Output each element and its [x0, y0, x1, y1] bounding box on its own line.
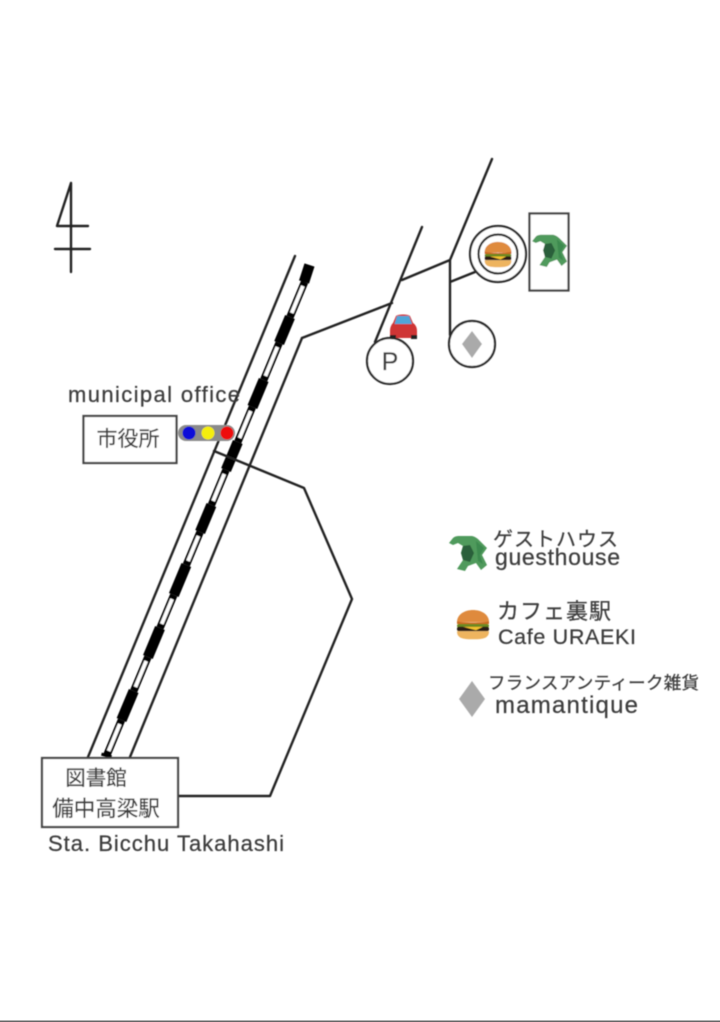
legend: mamantique: フランスアンティーク雑貨 — [488, 673, 699, 693]
railway tracks — [88, 256, 310, 757]
main road to cafe — [302, 159, 492, 342]
road from station crossing the tracks — [178, 451, 352, 796]
legend: cafe — [457, 599, 636, 649]
station box: 図書館 — [65, 767, 127, 790]
station box: 備中高梁駅 — [52, 797, 160, 821]
municipal office label: municipal office — [68, 382, 240, 407]
parking marker: P — [382, 348, 398, 376]
legend: cafe: カフェ裏駅 — [497, 599, 611, 624]
mamantique marker — [449, 321, 495, 367]
legend: cafe: Cafe URAEKI — [498, 625, 636, 649]
legend: guesthouse: guesthouse — [495, 544, 620, 570]
municipal office box: 市役所 — [96, 428, 160, 451]
legend: mamantique — [459, 673, 699, 719]
legend: mamantique: mamantique — [495, 692, 638, 719]
traffic signal — [178, 425, 235, 441]
parking marker — [367, 338, 413, 384]
guesthouse marker — [530, 214, 568, 290]
north arrow — [55, 183, 90, 272]
icon: car — [390, 314, 417, 339]
station box — [42, 758, 178, 827]
legend: guesthouse: ゲストハウス — [493, 528, 618, 551]
station name: Sta. Bicchu Takahashi — [48, 831, 284, 856]
municipal office box — [84, 416, 176, 463]
cafe marker — [470, 226, 526, 282]
legend: guesthouse — [449, 528, 620, 571]
